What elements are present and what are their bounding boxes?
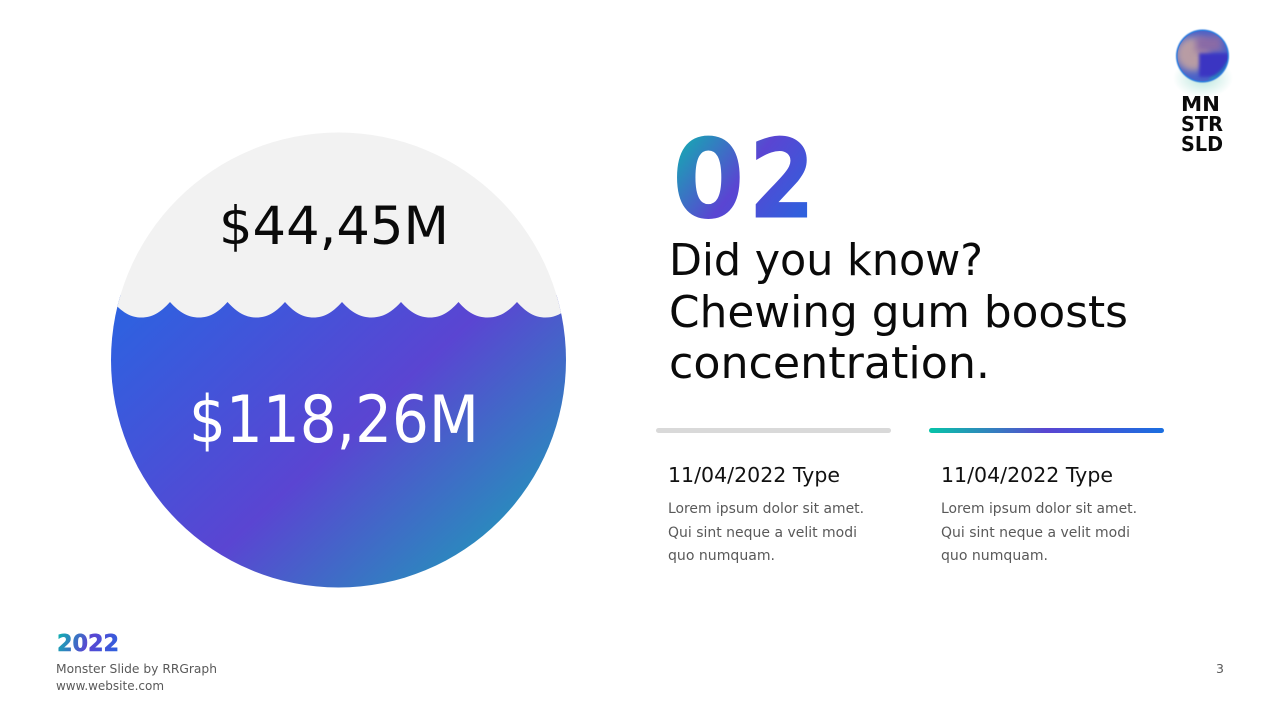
big number 02: 0 — [674, 120, 743, 238]
text block: left column: quo numquam. — [668, 548, 775, 564]
text block: left column: 11/04/2022 Type — [668, 463, 840, 487]
logo text: STR — [1181, 112, 1223, 136]
heading: concentration. — [669, 338, 990, 389]
text block: right column: Qui sint neque a velit modi — [941, 525, 1130, 541]
chart: split circle — [111, 132, 566, 588]
big number 02 — [674, 120, 813, 238]
footer: credits: Monster Slide by RRGraph — [56, 661, 217, 676]
logo text — [1181, 92, 1223, 156]
footer: credits — [56, 661, 217, 693]
text block: right column: quo numquam. — [941, 548, 1048, 564]
value: top: $44,45M — [219, 196, 449, 257]
text block: left column: Qui sint neque a velit modi — [668, 525, 857, 541]
big number 02: 2 — [752, 120, 813, 238]
divider: gradient bar — [929, 428, 1164, 433]
water wave top area — [118, 132, 561, 318]
text block: right column — [941, 463, 1137, 564]
logo text: SLD — [1181, 132, 1223, 156]
footer: year: 2022 — [57, 631, 119, 657]
footer: credits: www.website.com — [56, 678, 164, 693]
logo — [1175, 28, 1230, 152]
divider: gray bar — [656, 428, 891, 433]
text block: left column — [668, 463, 864, 564]
logo text: MN — [1181, 92, 1220, 116]
text block: right column: Lorem ipsum dolor sit amet. — [941, 501, 1137, 517]
value: bottom: $118,26M — [189, 383, 479, 458]
text block: left column: Lorem ipsum dolor sit amet. — [668, 501, 864, 517]
page number: 3 — [1216, 661, 1224, 676]
heading: Did you know? — [669, 235, 983, 286]
heading: Chewing gum boosts — [669, 287, 1128, 338]
heading — [669, 235, 1128, 389]
text block: right column: 11/04/2022 Type — [941, 463, 1113, 487]
icon: logo sphere — [1175, 28, 1230, 96]
